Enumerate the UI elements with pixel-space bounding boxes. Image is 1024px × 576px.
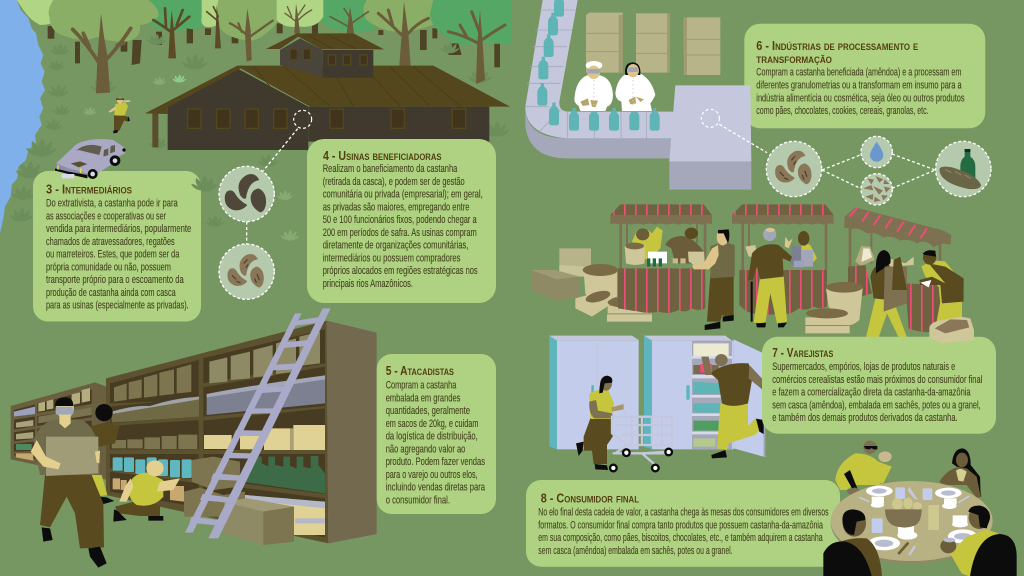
plates and cups — [859, 486, 977, 555]
market stall 2 — [732, 204, 834, 315]
woman with bag — [866, 250, 907, 337]
text block 3: para as usinas (especialmente as privadas). — [46, 300, 189, 312]
icon: pickup truck — [55, 139, 126, 179]
dashed connector: factory to nuts — [247, 110, 312, 245]
text block 8 — [538, 506, 829, 557]
heading 4: 4 - Usinas beneficiadoras — [323, 149, 442, 163]
ladder — [185, 308, 331, 538]
heading 8: 8 - Consumidor final — [541, 491, 639, 505]
panel 4: usinas beneficiadoras — [307, 139, 496, 303]
tree trunks and branches — [73, 2, 505, 93]
text block 5: incluindo vendas diretas para — [386, 482, 486, 494]
text block 5: o consumidor final. — [386, 494, 450, 506]
sack and crate, right — [805, 282, 863, 333]
text block 3: chamados de atravessadores, regatões — [46, 236, 175, 248]
left fridge — [549, 336, 639, 449]
text block 5 — [386, 380, 486, 506]
text block 4: diretamente de organizações comunitárias, — [323, 240, 468, 252]
heading 5: 5 - Atacadistas — [386, 364, 454, 378]
processing machine — [669, 85, 751, 190]
market stall 3 — [844, 207, 951, 332]
icon: shelled nuts — [219, 166, 274, 222]
text block 3: produção de castanha ainda com casca — [46, 287, 176, 299]
worker with black hair — [615, 62, 655, 111]
vendor with apron — [919, 250, 964, 328]
stacked boxes — [184, 457, 294, 545]
text block 3: Do extrativista, a castanha pode ir para — [46, 198, 178, 210]
icon: nuts — [766, 141, 822, 197]
text block 3 — [46, 198, 191, 312]
river — [0, 0, 45, 233]
panel 3: intermediários — [33, 171, 201, 322]
person walking — [108, 98, 131, 133]
person with glasses eating — [835, 441, 892, 495]
background trunks — [48, 22, 500, 67]
bushes — [10, 34, 510, 227]
conveyor belt — [525, 0, 675, 158]
person crouching — [113, 460, 180, 522]
text block 5: em sacos de 20kg, e cuidam — [386, 418, 478, 430]
panel 7: varejistas — [762, 337, 996, 434]
heading 6: 6 - Indústrias de processamento e — [756, 39, 918, 53]
heading 7: 7 - Varejistas — [772, 346, 833, 360]
text block 6: como pães, chocolates, cookies, cereais, granolas, etc. — [756, 105, 929, 117]
woman with shopping cart — [576, 376, 624, 470]
text block 3: ou marreteiros. Estes, que podem ser da — [46, 248, 180, 260]
back shelf — [11, 382, 108, 480]
text block 5: da logística de distribuição, — [386, 430, 478, 442]
icon: flour pieces — [861, 174, 892, 205]
panel 5: atacadistas — [377, 354, 496, 514]
forest scene with river — [0, 0, 512, 299]
text block 4: 50 e 100 funcionários fixos, podendo chegar a — [323, 214, 477, 226]
panel 6: indústrias — [744, 24, 985, 128]
factory building — [145, 33, 510, 150]
text block 3: própria comunidade ou não, possuem — [46, 261, 171, 273]
text block 4: intermediários ou possuem compradores — [323, 252, 461, 264]
text block 8: formatos. O consumidor final compra tanto produtos que possuem castanha-da-amazônia — [538, 519, 824, 531]
text block 7 — [772, 361, 982, 424]
supermarket fridges — [549, 336, 768, 471]
person with vest — [688, 229, 735, 330]
small bright plant — [172, 74, 187, 83]
man reaching into fridge — [701, 354, 768, 458]
dining table — [831, 481, 993, 564]
text block 4: 200 em períodos de safra. As usinas compram — [323, 227, 477, 239]
woman eating — [939, 448, 982, 498]
text block 3: as associações e cooperativas ou ser — [46, 210, 166, 222]
icon: nuts with skin — [219, 244, 274, 299]
bread bowl — [885, 498, 922, 528]
heading 6: transformação — [756, 52, 832, 66]
market stall 1 — [610, 204, 712, 313]
crates and sacks, left — [531, 248, 652, 322]
shopping cart — [610, 410, 672, 471]
main shelf unit — [106, 321, 377, 543]
text block 6 — [756, 67, 965, 117]
bottles — [537, 0, 660, 131]
canopies — [17, 0, 58, 25]
text block 8: sem casca (amêndoa) embalada em sachês, potes ou a granel. — [538, 545, 733, 557]
text block 8: No elo final desta cadeia de valor, a castanha chega às mesas dos consumidores em diversos — [538, 506, 829, 518]
icon: bread and bottle — [936, 141, 991, 197]
text block 4: (retirada da casca), e podem ser de gestão — [323, 176, 465, 188]
dashed connectors: machine to products — [701, 109, 935, 188]
text block 3: transporte próprio para o escoamento da — [46, 274, 184, 286]
dining scene — [823, 441, 1017, 576]
text block 5: não agregando valor ao — [386, 443, 465, 455]
shelf items — [114, 364, 191, 402]
cardboard boxes — [586, 13, 720, 75]
heading 6 — [756, 39, 918, 66]
wholesale warehouse scene — [11, 308, 377, 568]
worker in white coat — [574, 61, 613, 111]
person seated front right — [940, 506, 1017, 576]
text block 4: próprios alocados em regiões estratégicas nos — [323, 265, 478, 277]
text block 4 — [323, 163, 483, 290]
text block 5: embalada em grandes — [386, 392, 461, 404]
icon: oil drop — [861, 136, 892, 168]
person behind in brown — [88, 404, 120, 505]
text block 4: comunitária ou privada (empresarial); em geral, — [323, 188, 483, 200]
person seated front left — [823, 509, 882, 576]
man carrying box — [31, 397, 107, 568]
bush over panel corner — [191, 176, 217, 191]
text block 5: para o varejo ou outros elos, — [386, 469, 478, 481]
text block 5: Compram a castanha — [386, 380, 457, 392]
text block 5: produto. Podem fazer vendas — [386, 456, 485, 468]
heading 3: 3 - Intermediários — [46, 182, 132, 196]
text block 8: em sua composição, como pães, biscoitos, chocolates, etc., e também adquirem a castanha — [538, 532, 823, 544]
text block 5: quantidades, geralmente — [386, 405, 470, 417]
text block 3: vendida para intermediários, popularmente — [46, 223, 191, 235]
person with cane — [748, 228, 793, 327]
text block 4: Realizam o baneficiamento da castanha — [323, 163, 458, 175]
text block 4: as privadas são maiores, empregando entre — [323, 201, 469, 213]
crate over panel 7 — [929, 317, 974, 343]
panel 8: consumidor final — [526, 480, 840, 567]
right fridge with open door — [644, 336, 765, 457]
text block 4: principais rios Amazônicos. — [323, 278, 413, 290]
factory scene — [525, 0, 991, 337]
